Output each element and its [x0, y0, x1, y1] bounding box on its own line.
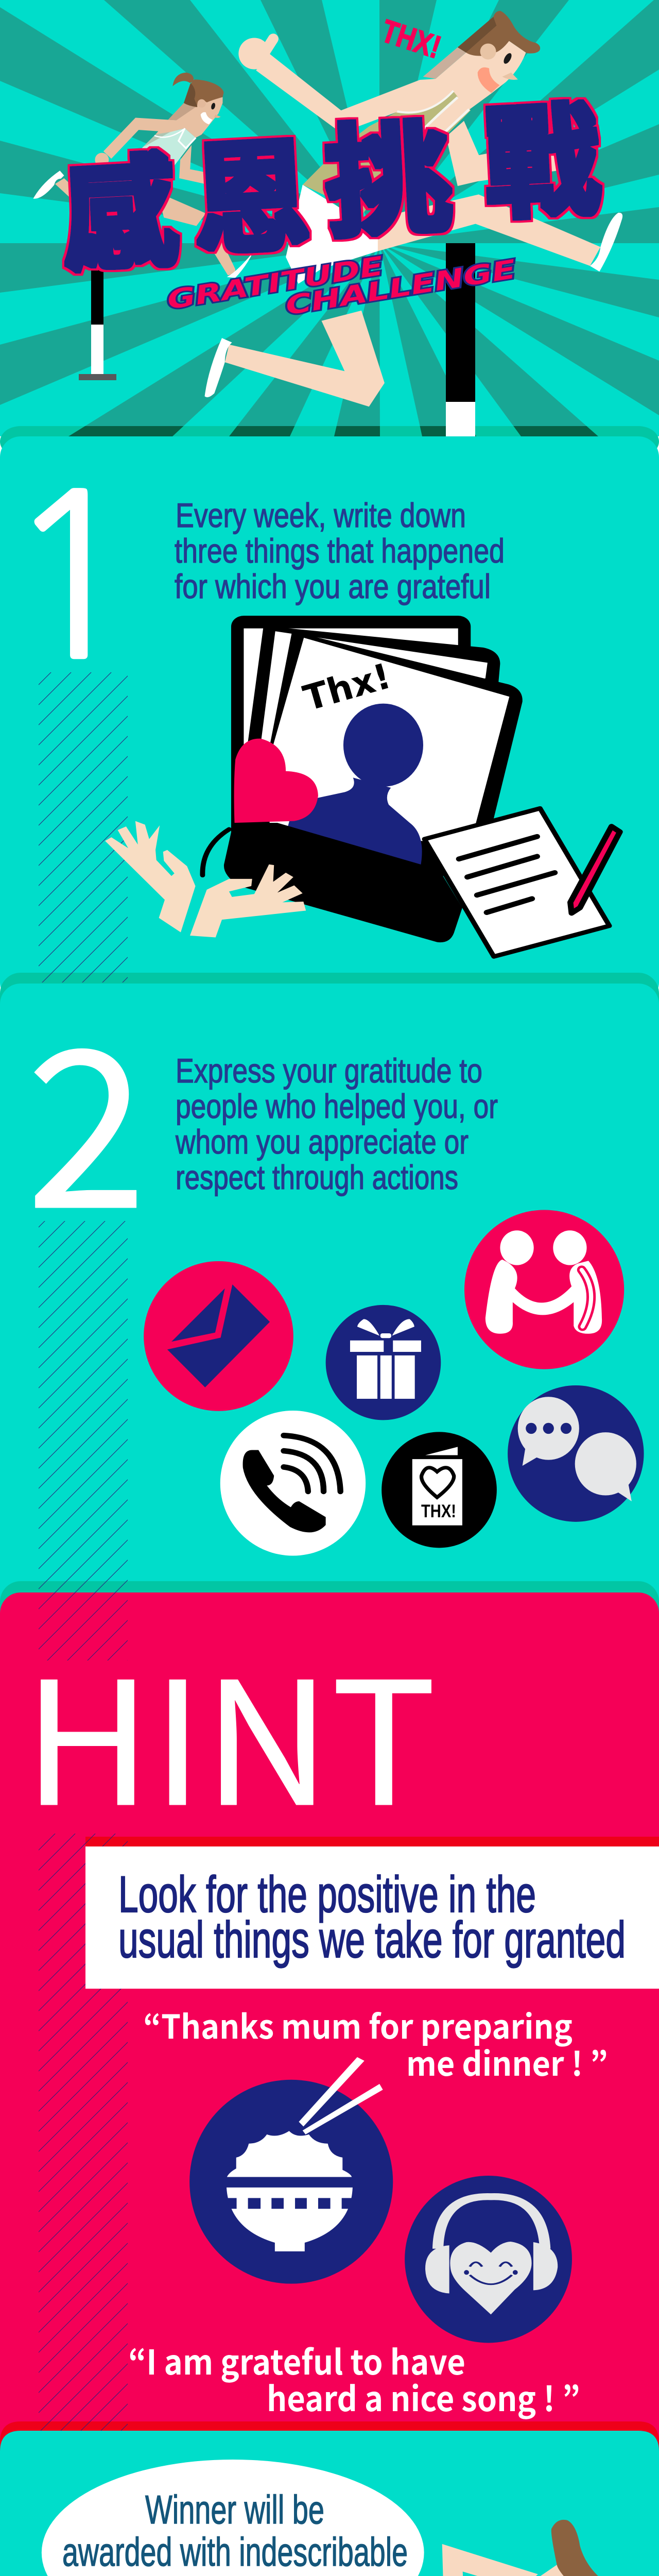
- card bottom band: [224, 823, 462, 942]
- title Chinese: 恩: [190, 128, 313, 270]
- relaxing man: [43, 2520, 645, 2576]
- icon: gift: [326, 1305, 441, 1420]
- panel 1 number: 1: [3, 464, 141, 690]
- hero man runner: [238, 11, 622, 284]
- quote 1: “Thanks mum for preparing: [143, 2001, 573, 2048]
- icon: rice bowl: [189, 2057, 393, 2284]
- panel 2 icons: [144, 1210, 644, 1556]
- panel 2 number: 2: [26, 954, 147, 1271]
- middle card: [235, 626, 500, 854]
- panel 2 text: whom you appreciate or: [175, 1123, 469, 1161]
- person silhouette: [288, 704, 423, 868]
- panel 1 background: [0, 436, 659, 1003]
- panel 3 hatch: [39, 1834, 128, 2431]
- panel 1 text: for which you are grateful: [175, 567, 491, 605]
- curved line: [202, 829, 229, 875]
- panel 1 text: Every week, write down: [176, 496, 466, 534]
- bubble text: Winner will be: [145, 2487, 324, 2532]
- THX text: THX!: [377, 13, 445, 65]
- pencil: [570, 826, 620, 913]
- icon: headphones heart: [405, 2176, 572, 2343]
- card THX label: THX!: [421, 1501, 456, 1521]
- quote 2: heard a nice song ! ”: [267, 2372, 580, 2421]
- left hand: [105, 821, 196, 933]
- title Chinese: 挑: [321, 110, 456, 253]
- quote 1: [143, 2001, 608, 2086]
- title Chinese: 感: [59, 144, 181, 286]
- panel 3 shadow: [0, 1581, 659, 1633]
- icon: thank-you card: [381, 1432, 497, 1548]
- panel 4 background: [0, 2431, 659, 2576]
- hero background: sunburst rays: [0, 0, 659, 457]
- paper note: [424, 808, 610, 957]
- hint heading: HINT: [23, 1607, 437, 1854]
- right hurdle: [446, 243, 475, 436]
- panel 1 illustration: thank you cards and hands: [105, 616, 620, 957]
- icon: handshake: [464, 1210, 624, 1369]
- icon: chat bubbles: [508, 1385, 644, 1522]
- panel 2 text: [175, 1052, 498, 1196]
- panel 2 text: respect through actions: [176, 1158, 458, 1196]
- quote 2: [128, 2335, 580, 2421]
- hint box: [85, 1846, 659, 1989]
- panel 2 background: [0, 984, 659, 1653]
- panel 2 text: people who helped you, or: [176, 1087, 498, 1125]
- quote 1: me dinner ! ”: [406, 2038, 608, 2086]
- panel 1 text: three things that happened: [175, 532, 505, 570]
- panel 2 hatch: [39, 1221, 128, 1660]
- icon: envelope: [144, 1261, 293, 1411]
- panel 4 shadow: [0, 2421, 659, 2463]
- hatch remnant on panel 4 shadow: [39, 2421, 128, 2431]
- quote 2: “I am grateful to have: [128, 2335, 465, 2385]
- front card: [252, 631, 523, 861]
- title English: GRATITUDE: [165, 251, 385, 315]
- right hand: [190, 865, 306, 937]
- panel 1 text: [175, 496, 505, 605]
- left hurdle: [79, 263, 116, 380]
- panel 4 illustration: [42, 2460, 645, 2576]
- panel 2 shadow: [0, 973, 659, 1024]
- icon: telephone: [220, 1411, 366, 1556]
- hero man back leg: [205, 311, 385, 406]
- title English: [165, 251, 518, 321]
- bubble text: [62, 2487, 408, 2576]
- title English: CHALLENGE: [284, 254, 518, 321]
- bubble text: awarded with indescribable: [62, 2529, 408, 2574]
- panel 1 hatch: [39, 672, 128, 982]
- back card: [231, 616, 471, 876]
- heart: [234, 739, 318, 823]
- hint icons: [189, 2057, 572, 2343]
- title Chinese: 戰: [481, 92, 603, 234]
- title Chinese: [59, 92, 603, 286]
- panel 3 background: [0, 1592, 659, 2468]
- card Thx text: Thx!: [299, 656, 395, 719]
- panel 2 text: Express your gratitude to: [176, 1052, 482, 1090]
- hero woman runner: [33, 73, 253, 278]
- speech bubble: [42, 2460, 424, 2576]
- hint box shadow: [85, 1837, 659, 1857]
